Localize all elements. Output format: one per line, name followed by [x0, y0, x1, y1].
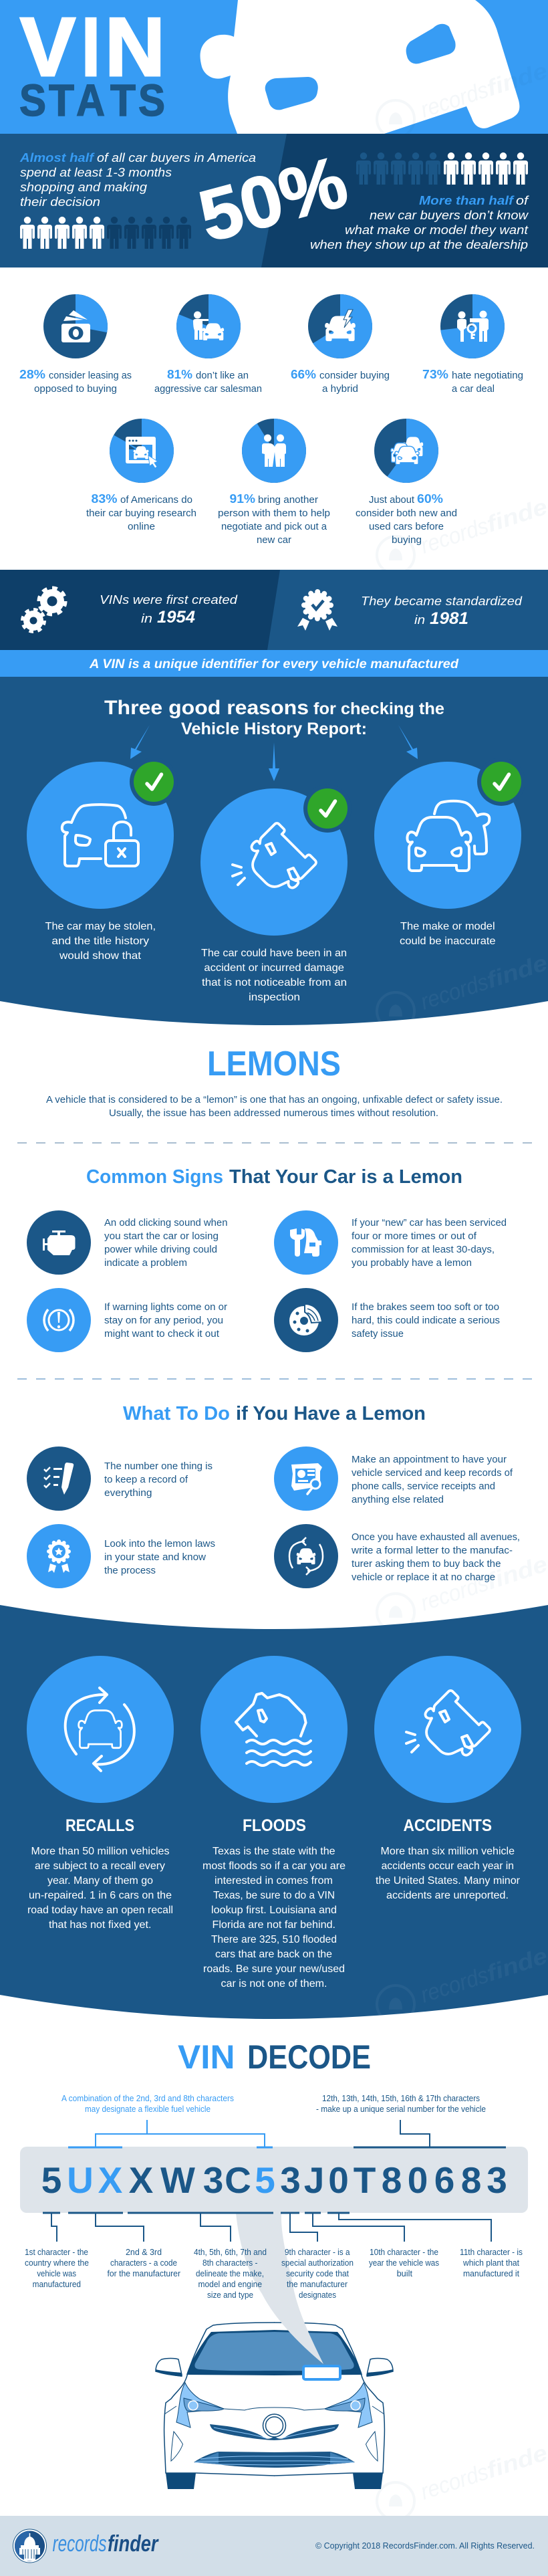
stat: 91% bring another person: negotiate and pick out a: [221, 521, 327, 532]
panel: VIN number: W: [160, 2159, 195, 2201]
stat: 73% negotiating: [422, 294, 523, 395]
step: keep records: [27, 1446, 213, 1511]
panel: VIN number: 8: [461, 2159, 481, 2201]
panel: hero header: [0, 0, 548, 138]
captions: VIN character meanings: special authorization: [281, 2258, 354, 2268]
text: almost half of car buyers: [19, 151, 256, 209]
stat: 83% online research: of Americans do: [120, 494, 192, 506]
reason: make or model: could be inaccurate: [400, 936, 496, 947]
stat: 91% bring another person: new car: [257, 534, 291, 546]
panel: recalls floods accidents: records: [418, 1962, 491, 2008]
step: make appointment: vehicle serviced and keep records of: [352, 1467, 513, 1479]
sign: serviced often: you probably have a lemon: [352, 1257, 472, 1269]
captions: VIN character meanings: 2nd & 3rd: [126, 2247, 162, 2257]
stat: 66% hybrid: a hybrid: [322, 383, 358, 395]
step: letter to manufacturer: write a formal letter to the manufac-: [351, 1545, 513, 1556]
captions: VIN character meanings: size and type: [207, 2290, 253, 2300]
icon: gears: [23, 588, 65, 631]
card: floods: Texas, be sure to do a VIN: [213, 1890, 335, 1901]
card: recalls: un-repaired. 1 in 6 cars on the: [29, 1890, 172, 1901]
heading: VIN DECODE: [178, 2038, 371, 2076]
captions: VIN character meanings: security code that: [286, 2268, 349, 2278]
panel: VIN number: 3: [487, 2159, 507, 2201]
panel: statistics pies: [20, 294, 546, 570]
panel: VIN number: 3: [280, 2159, 301, 2201]
panel: VIN number: X: [98, 2159, 123, 2201]
panel: VIN number: X: [129, 2159, 154, 2201]
title: VIN: N: [105, 1, 165, 94]
captions: VIN character meanings: year the vehicle was: [369, 2258, 439, 2268]
text: lemon definition: [46, 1094, 503, 1119]
text: standardized 1981: 1981: [430, 609, 468, 628]
panel: hero header: records: [418, 77, 491, 123]
heading: VIN DECODE: DECODE: [247, 2038, 371, 2076]
card: floods: FLOODS: [243, 1816, 306, 1835]
heading: three good reasons: for checking the: [313, 700, 444, 718]
captions: VIN character meanings: for the manufacturer: [107, 2268, 181, 2278]
captions: VIN character meanings: 10th character - the: [370, 2247, 438, 2257]
sign: clicking sound: power while driving could: [104, 1244, 217, 1255]
reason: accident: accident or incurred damage: [204, 962, 344, 974]
sign: serviced often: [274, 1210, 507, 1275]
title: VIN: [20, 1, 165, 94]
panel: VIN number: C: [225, 2159, 251, 2201]
arrow: right: [398, 725, 418, 759]
captions: VIN character meanings: vehicle was: [37, 2268, 76, 2278]
connectors: bottom brackets: [43, 2213, 491, 2242]
step: make appointment: [274, 1446, 513, 1511]
panel: VIN history band: [0, 570, 548, 650]
note: serial number characters: - make up a unique serial number for the vehicle: [316, 2104, 486, 2114]
step: lemon laws: Look into the lemon laws: [104, 1538, 215, 1549]
heading: VIN DECODE: VIN: [178, 2038, 235, 2076]
heading: common signs: That Your Car is a Lemon: [229, 1166, 462, 1188]
captions: VIN character meanings: 9th character - is a: [285, 2247, 350, 2257]
text: lemon definition: Usually, the issue has been addressed numerous times without resolution.: [109, 1107, 438, 1119]
panel: footer: [0, 2516, 548, 2576]
text: VINs first created 1954: VINs were first created: [100, 593, 238, 607]
text: standardized 1981: [361, 595, 523, 628]
stat: 73% negotiating: hate negotiating: [452, 370, 523, 381]
title: VIN: V: [20, 1, 76, 94]
stat: 60% new and used: 60%: [417, 492, 443, 506]
text: more than half of new car buyers: More than half: [419, 194, 515, 207]
panel: recalls floods accidents: [0, 1605, 548, 2023]
step: make appointment: anything else related: [352, 1494, 444, 1505]
panel: VIN number: 5: [255, 2159, 275, 2201]
card: floods: lookup first. Louisiana and: [211, 1905, 337, 1916]
panel: fifty percent stats: [0, 134, 548, 267]
heading: what to do: [123, 1403, 426, 1424]
panel: VIN number: 6: [434, 2159, 454, 2201]
text: more than half of new car buyers: new car buyers don’t know: [370, 209, 529, 222]
text: more than half of new car buyers: what make or model they want: [345, 223, 529, 237]
stat: 91% bring another person: [218, 419, 330, 546]
captions: VIN character meanings: built: [397, 2268, 412, 2278]
panel: VIN number: 3: [203, 2159, 223, 2201]
logo text: finder: [108, 2531, 159, 2557]
reason: accident: that is not noticeable from an: [202, 977, 347, 988]
text: standardized 1981: in: [414, 613, 425, 627]
note: serial number characters: [316, 2093, 486, 2114]
stat: 60% new and used: consider both new and: [356, 508, 457, 519]
text: VINs first created 1954: [100, 593, 238, 627]
panel: VIN number: 0: [328, 2159, 349, 2201]
reason: accident: inspection: [249, 992, 300, 1003]
note: flexible fuel characters: A combination of the 2nd, 3rd and 8th characters: [61, 2093, 234, 2103]
step: lemon laws: in your state and know: [104, 1551, 206, 1563]
heading: common signs: [86, 1166, 462, 1188]
panel: VIN number: [20, 2147, 528, 2213]
heading: three good reasons: Three good reasons: [104, 697, 309, 719]
reason: make or model: [374, 758, 525, 947]
title: STATS: T: [49, 76, 74, 126]
sign: brakes: If the brakes seem too soft or too: [352, 1301, 499, 1313]
panel: three good reasons: [0, 677, 548, 1030]
card: floods: cars that are back on the: [215, 1949, 332, 1960]
heading: three good reasons: Vehicle History Report:: [181, 720, 367, 738]
panel: three good reasons: records: [418, 969, 491, 1015]
reason: stolen: The car may be stolen,: [45, 921, 156, 932]
card: floods: most floods so if a car you are: [202, 1860, 346, 1872]
reason: stolen: would show that: [59, 950, 142, 962]
panel: VIN number: 0: [408, 2159, 428, 2201]
icon: VIN plate: [303, 2366, 340, 2379]
panel: VIN number: 8: [382, 2159, 402, 2201]
sign: warning lights: might want to check it out: [104, 1328, 220, 1339]
chart: five of ten people, left: [20, 217, 191, 249]
banner: unique identifier: A VIN is a unique identifier for every vehicle manufactured: [89, 657, 458, 671]
connectors: top brackets: [68, 2120, 506, 2147]
icon: award ribbon: [297, 592, 337, 631]
sign: serviced often: If your “new” car has been serviced: [352, 1217, 507, 1228]
sign: warning lights: If warning lights come on or: [104, 1301, 227, 1313]
captions: VIN character meanings: the manufacturer: [287, 2279, 348, 2289]
captions: VIN character meanings: 1st character - the: [25, 2247, 88, 2257]
title: STATS: S: [19, 76, 46, 126]
card: recalls: RECALLS: [65, 1816, 134, 1835]
icon: car with windshield VIN plate: [156, 2323, 393, 2489]
step: make appointment: Make an appointment to have your: [352, 1454, 507, 1465]
card: accidents: accidents are unreported.: [386, 1890, 509, 1901]
card: accidents: More than six million vehicle: [381, 1846, 515, 1857]
banner: unique identifier: [0, 650, 548, 677]
sign: clicking sound: indicate a problem: [104, 1257, 187, 1269]
sign: serviced often: four or more times or out of: [352, 1230, 477, 1242]
panel: VIN number: U: [67, 2159, 94, 2201]
icon: records finder logo: [13, 2529, 47, 2563]
card: accidents: the United States. Many minor: [376, 1875, 521, 1887]
captions: VIN character meanings: country where the: [25, 2258, 89, 2268]
stat: 91% bring another person: person with them to help: [218, 508, 330, 519]
captions: VIN character meanings: model and engine: [198, 2279, 262, 2289]
copyright: © Copyright 2018 RecordsFinder.com. All Rights Reserved.: [315, 2541, 535, 2551]
card: accidents: ACCIDENTS: [404, 1816, 492, 1835]
stat: 81% aggressive salesman: 81%: [167, 368, 192, 381]
heading: what to do: if You Have a Lemon: [236, 1403, 426, 1424]
sign: warning lights: stay on for any period, you: [104, 1315, 223, 1326]
stat: 60% new and used: buying: [392, 534, 422, 546]
heading: three good reasons: [104, 697, 444, 738]
card: accidents: accidents occur each year in: [382, 1860, 514, 1872]
title: STATS: T: [110, 76, 136, 126]
stat: 60% new and used: used cars before: [369, 521, 444, 532]
big number: 50%: 50%: [191, 140, 355, 257]
card: recalls: road today have an open recall: [27, 1905, 173, 1916]
sign: clicking sound: you start the car or losing: [104, 1230, 219, 1242]
captions: VIN character meanings: delineate the make,: [196, 2268, 264, 2278]
title: STATS: A: [76, 76, 105, 126]
reason: stolen: and the title history: [51, 936, 149, 947]
card: floods: Florida are not far behind.: [213, 1919, 335, 1931]
stat: 91% bring another person: 91%: [230, 492, 255, 506]
stat: 83% online research: their car buying research: [86, 508, 196, 519]
logo text: records: [52, 2531, 107, 2557]
stat: 83% online research: online: [128, 521, 155, 532]
sign: brakes: hard, this could indicate a serious: [352, 1315, 500, 1326]
card: floods: roads. Be sure your new/used: [203, 1963, 345, 1975]
stat: 66% hybrid: 66%: [291, 368, 316, 381]
step: letter to manufacturer: turer asking them to buy back the: [352, 1558, 501, 1570]
stat: 73% negotiating: a car deal: [452, 383, 495, 395]
text: VINs first created 1954: 1954: [157, 608, 195, 627]
stat: 81% aggressive salesman: aggressive car salesman: [154, 383, 262, 395]
stat: 60% new and used: [356, 419, 457, 546]
reason: make or model: The make or model: [400, 921, 495, 932]
captions: VIN character meanings: characters - a code: [110, 2258, 177, 2268]
text: more than half of new car buyers: [310, 194, 529, 251]
captions: VIN character meanings: manufactured it: [463, 2268, 519, 2278]
stat: 81% aggressive salesman: don’t like an: [196, 370, 249, 381]
stat: 28% leasing: 28%: [19, 368, 45, 381]
stat: 28% leasing: opposed to buying: [34, 383, 117, 395]
step: make appointment: phone calls, service receipts and: [352, 1481, 495, 1492]
card: recalls: [27, 1656, 174, 1931]
card: floods: car is not one of them.: [221, 1978, 327, 1990]
captions: VIN character meanings: 11th character - is: [460, 2247, 523, 2257]
stat: 28% leasing: [19, 294, 132, 395]
captions: VIN character meanings: designates: [299, 2290, 336, 2300]
text: almost half of car buyers: their decision: [20, 195, 100, 209]
captions: VIN character meanings: 8th characters -: [202, 2258, 258, 2268]
icon: large white car silhouette: [200, 0, 519, 134]
title: STATS: [19, 76, 165, 126]
reason: stolen: [27, 758, 178, 962]
arrow: centre: [269, 742, 279, 781]
reason: accident: The car could have been in an: [201, 948, 347, 959]
step: lemon laws: [27, 1524, 215, 1588]
text: VINs first created 1954: in: [141, 612, 152, 625]
heading: LEMONS: LEMONS: [207, 1045, 341, 1083]
step: letter to manufacturer: [274, 1524, 520, 1588]
text: more than half of new car buyers: of: [516, 194, 529, 207]
sign: serviced often: commission for at least 30-days,: [352, 1244, 495, 1255]
panel: VIN number: J: [304, 2159, 324, 2201]
reason: accident: [200, 784, 352, 1003]
sign: brakes: safety issue: [352, 1328, 404, 1339]
stat: 28% leasing: consider leasing as: [49, 370, 132, 381]
sign: clicking sound: An odd clicking sound when: [104, 1217, 227, 1228]
text: records: [418, 2459, 491, 2505]
stat: 66% hybrid: consider buying: [319, 370, 390, 381]
step: keep records: The number one thing is: [104, 1461, 213, 1472]
heading: common signs: Common Signs: [86, 1166, 223, 1188]
callout: pointer to VIN plate: [236, 2213, 323, 2364]
card: floods: Texas is the state with the: [213, 1846, 335, 1857]
title: VIN: I: [82, 1, 100, 94]
stat: 60% new and used: Just about: [369, 494, 415, 506]
note: flexible fuel characters: may designate a flexible fuel vehicle: [85, 2104, 211, 2114]
text: standardized 1981: They became standardized: [361, 595, 523, 608]
captions: VIN character meanings: which plant that: [462, 2258, 519, 2268]
stat: 66% hybrid: [291, 294, 390, 395]
text: almost half of car buyers: spend at least 1-3 months: [20, 166, 172, 179]
card: recalls: are subject to a recall every: [35, 1860, 165, 1872]
card: floods: There are 325, 510 flooded: [211, 1934, 337, 1945]
step: letter to manufacturer: vehicle or replace it at no charge: [352, 1572, 495, 1583]
note: serial number characters: 12th, 13th, 14th, 15th, 16th & 17th characters: [322, 2093, 480, 2103]
card: floods: [200, 1656, 348, 1990]
text: almost half of car buyers: shopping and making: [20, 181, 147, 194]
card: recalls: More than 50 million vehicles: [31, 1846, 170, 1857]
text: records: [418, 1570, 491, 1616]
card: recalls: year. Many of them go: [47, 1875, 153, 1887]
captions: VIN character meanings: manufactured: [33, 2279, 81, 2289]
step: keep records: to keep a record of: [104, 1474, 188, 1485]
stat: 83% online research: [86, 419, 196, 532]
text: almost half of car buyers: Almost half: [19, 151, 95, 165]
panel: statistics pies: records: [418, 513, 491, 559]
sign: warning lights: [27, 1288, 227, 1352]
title: STATS: S: [138, 76, 165, 126]
panel: VIN number: 5: [41, 2159, 61, 2201]
stat: 81% aggressive salesman: [154, 294, 262, 395]
panel: VIN number: T: [354, 2159, 376, 2201]
heading: what to do: What To Do: [123, 1403, 230, 1424]
step: keep records: everything: [104, 1487, 152, 1499]
text: more than half of new car buyers: when they show up at the dealership: [310, 238, 528, 251]
sign: brakes: [274, 1288, 500, 1352]
card: floods: interested in comes from: [215, 1875, 333, 1887]
stat: 73% negotiating: 73%: [422, 368, 448, 381]
text: lemon definition: A vehicle that is considered to be a “lemon” is one that has an ongoing, unfixable defect or safety issue.: [46, 1094, 503, 1105]
step: letter to manufacturer: Once you have exhausted all avenues,: [352, 1531, 520, 1543]
card: accidents: [374, 1656, 521, 1901]
chart: five of ten people, right: [356, 152, 528, 185]
stat: 91% bring another person: bring another: [258, 494, 318, 506]
step: lemon laws: the process: [104, 1565, 156, 1576]
arrow: left: [130, 725, 150, 759]
sign: clicking sound: [27, 1210, 227, 1275]
captions: VIN character meanings: [25, 2247, 523, 2300]
card: recalls: that has not fixed yet.: [49, 1919, 151, 1931]
captions: VIN character meanings: 4th, 5th, 6th, 7th and: [194, 2247, 267, 2257]
text: almost half of car buyers: of all car buyers in America: [97, 151, 256, 165]
stat: 83% online research: 83%: [91, 492, 118, 506]
note: flexible fuel characters: [61, 2093, 234, 2114]
